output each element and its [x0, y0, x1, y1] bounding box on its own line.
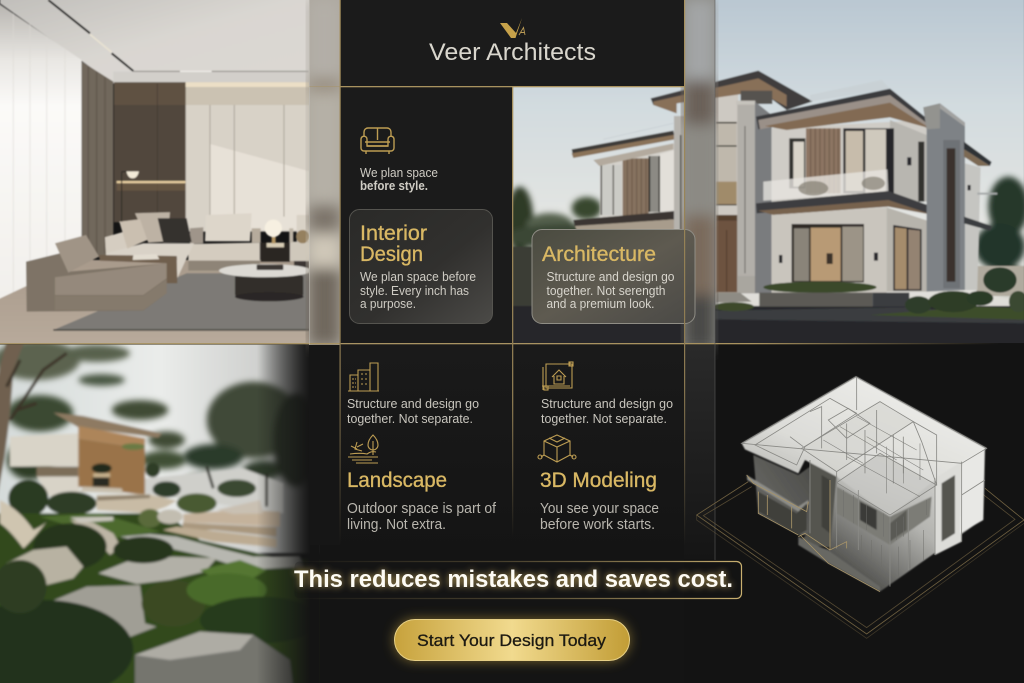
heading [360, 221, 427, 266]
heading: Architecture [542, 242, 656, 266]
description: and a premium look. [546, 296, 654, 311]
building massing [742, 377, 987, 592]
3d isometric house model [697, 377, 1024, 638]
icon: buildings [348, 363, 379, 391]
description [347, 501, 497, 533]
icon: sofa [361, 128, 394, 154]
tagline: We plan space [360, 166, 438, 180]
logo mark [500, 18, 525, 38]
glass card: architecture [532, 230, 695, 324]
heading: Interior [360, 221, 427, 245]
description: together. Not serength [546, 283, 666, 298]
tagline [360, 166, 438, 193]
photo: interior living room [0, 0, 317, 347]
heading: Landscape [347, 468, 447, 492]
description [360, 269, 476, 311]
description: together. Not separate. [347, 411, 473, 426]
glow: This reduces mistakes and saves cost. [294, 566, 733, 593]
description [540, 501, 659, 533]
panel: lower right services [512, 344, 684, 560]
callout text: This reduces mistakes and saves cost. [294, 566, 733, 593]
description: Outdoor space is part of [347, 501, 497, 517]
glass strip: left [309, 0, 340, 545]
description: living. Not extra. [347, 517, 446, 533]
icon: floor plan [542, 362, 573, 390]
panel: lower left services [340, 344, 512, 560]
description: style. Every inch has [360, 283, 469, 298]
description: before work starts. [540, 517, 655, 533]
description [347, 396, 479, 426]
glass strip: right [684, 0, 715, 559]
photo: modern house exterior [503, 0, 1024, 349]
description: Structure and design go [347, 396, 479, 411]
brand name: Veer Architects [429, 39, 596, 66]
base plate outline [697, 482, 1024, 638]
button label: Start Your Design Today [417, 631, 607, 650]
central panel: header [340, 0, 684, 87]
description: We plan space before [360, 269, 476, 284]
call to action button [394, 619, 630, 661]
description: You see your space [540, 501, 659, 517]
description: a purpose. [360, 296, 416, 311]
description: Structure and design go [546, 269, 674, 284]
icon: 3d cube [538, 435, 576, 462]
heading: 3D Modeling [540, 468, 657, 492]
glass card: interior design [350, 210, 492, 324]
photo: landscape garden [0, 333, 327, 683]
heading: Design [360, 242, 423, 266]
description: together. Not separate. [541, 411, 667, 426]
description [541, 396, 673, 426]
wireframe lines [742, 377, 987, 587]
dark band beneath house [684, 344, 1024, 683]
tagline: before style. [360, 179, 428, 193]
description [546, 269, 674, 311]
icon: landscape [348, 435, 378, 463]
panel: interior design [340, 87, 512, 344]
description: Structure and design go [541, 396, 673, 411]
callout banner [294, 562, 742, 598]
